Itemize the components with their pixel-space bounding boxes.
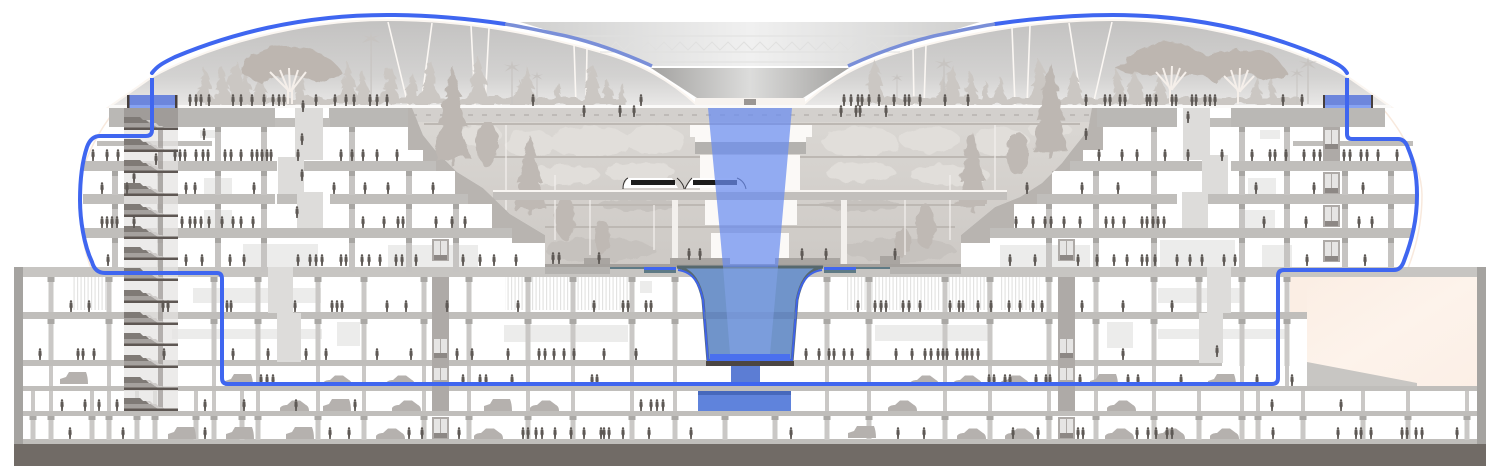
right rim base bbox=[824, 270, 856, 273]
panel: upper floor slabs left bbox=[83, 108, 512, 238]
thermal line: building envelope bbox=[80, 78, 1417, 384]
dome ribs right bbox=[913, 22, 1112, 105]
central white voids bbox=[690, 125, 812, 264]
waterfall column bbox=[708, 108, 792, 267]
columns bbox=[30, 127, 1470, 440]
atrium floor plinth left bbox=[545, 267, 610, 274]
fine vertical stripes bbox=[73, 277, 1040, 310]
faint outer skin line left bbox=[79, 77, 152, 270]
outer walls bbox=[14, 267, 1486, 444]
thermal line: right roof fade bbox=[848, 24, 995, 66]
cone base bbox=[695, 98, 805, 105]
bowl bbox=[412, 108, 1092, 267]
light foliage bbox=[458, 122, 1072, 185]
escalators bbox=[268, 108, 1231, 363]
pool floor bbox=[706, 361, 794, 366]
water shaft below pool bbox=[731, 366, 760, 386]
left rim bbox=[644, 267, 676, 270]
panel: basement and podium structure bbox=[14, 267, 1486, 466]
central grey beam bbox=[695, 142, 806, 154]
thermal line: left roof fade bbox=[505, 24, 652, 66]
pool blue lining bbox=[678, 270, 822, 360]
podium roof slab bbox=[14, 267, 1486, 277]
water tank bbox=[698, 391, 791, 411]
palms right bbox=[891, 57, 1317, 104]
terrace deck line bbox=[109, 105, 1391, 108]
thermal line: left roof bbox=[152, 15, 505, 73]
atrium floor bbox=[545, 264, 961, 267]
white trunks bbox=[506, 125, 995, 255]
interior screens bbox=[172, 130, 1292, 348]
panel: central roof opening bbox=[520, 22, 980, 105]
panel: left dome garden bbox=[109, 20, 697, 107]
foundation bbox=[14, 444, 1486, 466]
umbrella trees right bbox=[1117, 43, 1288, 104]
lower cone bbox=[651, 68, 849, 98]
truss pattern bbox=[570, 36, 930, 62]
viaduct piers bbox=[672, 200, 847, 265]
atrium trees bbox=[476, 119, 1029, 258]
floor slabs bbox=[14, 312, 1486, 444]
slab seen through pool bbox=[704, 312, 796, 319]
elevator core left bbox=[432, 239, 449, 439]
elevator core right bbox=[1323, 127, 1340, 262]
right rim bbox=[824, 267, 856, 270]
thermal line: right roof bbox=[995, 15, 1347, 73]
atrium floor plinth right bbox=[890, 267, 961, 274]
upper walkway bbox=[412, 108, 1092, 122]
skylight pool left bbox=[127, 95, 178, 108]
teal strips bbox=[610, 267, 890, 269]
tall atrium pines rising through the deck bbox=[434, 62, 1068, 165]
panel: upper floor slabs right bbox=[990, 108, 1415, 238]
faint outer skin line right bbox=[1348, 77, 1422, 268]
people bbox=[38, 94, 1459, 439]
dome ribs left bbox=[388, 22, 587, 105]
waterfall in pool bbox=[723, 267, 778, 354]
planter bands bbox=[424, 123, 1080, 228]
atrium steps bbox=[584, 256, 900, 264]
cone base block bbox=[744, 99, 756, 105]
palm tall left bbox=[362, 32, 380, 105]
cars bbox=[60, 372, 1239, 439]
right retaining soil bbox=[961, 108, 1103, 243]
panel: atrium forest bbox=[412, 108, 1092, 267]
pool basin bbox=[677, 267, 823, 362]
darker lower foliage bbox=[545, 199, 955, 262]
stair tower bbox=[124, 108, 178, 411]
left retaining soil bbox=[408, 108, 545, 243]
left rim base bbox=[644, 270, 676, 273]
panel: pool and waterfall bbox=[610, 108, 890, 411]
skylight pool right bbox=[1323, 95, 1373, 108]
elevator core middle bbox=[1058, 239, 1075, 439]
palms left bbox=[504, 61, 543, 104]
train bbox=[622, 178, 746, 189]
trees left bbox=[196, 56, 628, 105]
raked seating bbox=[1307, 362, 1417, 386]
panel: right dome garden bbox=[803, 20, 1391, 107]
train viaduct bbox=[493, 190, 1007, 200]
trees right bbox=[860, 60, 1300, 105]
panel: theatre bbox=[1290, 277, 1477, 386]
umbrella tree left bbox=[240, 46, 342, 104]
pool bottom water bbox=[710, 354, 790, 361]
